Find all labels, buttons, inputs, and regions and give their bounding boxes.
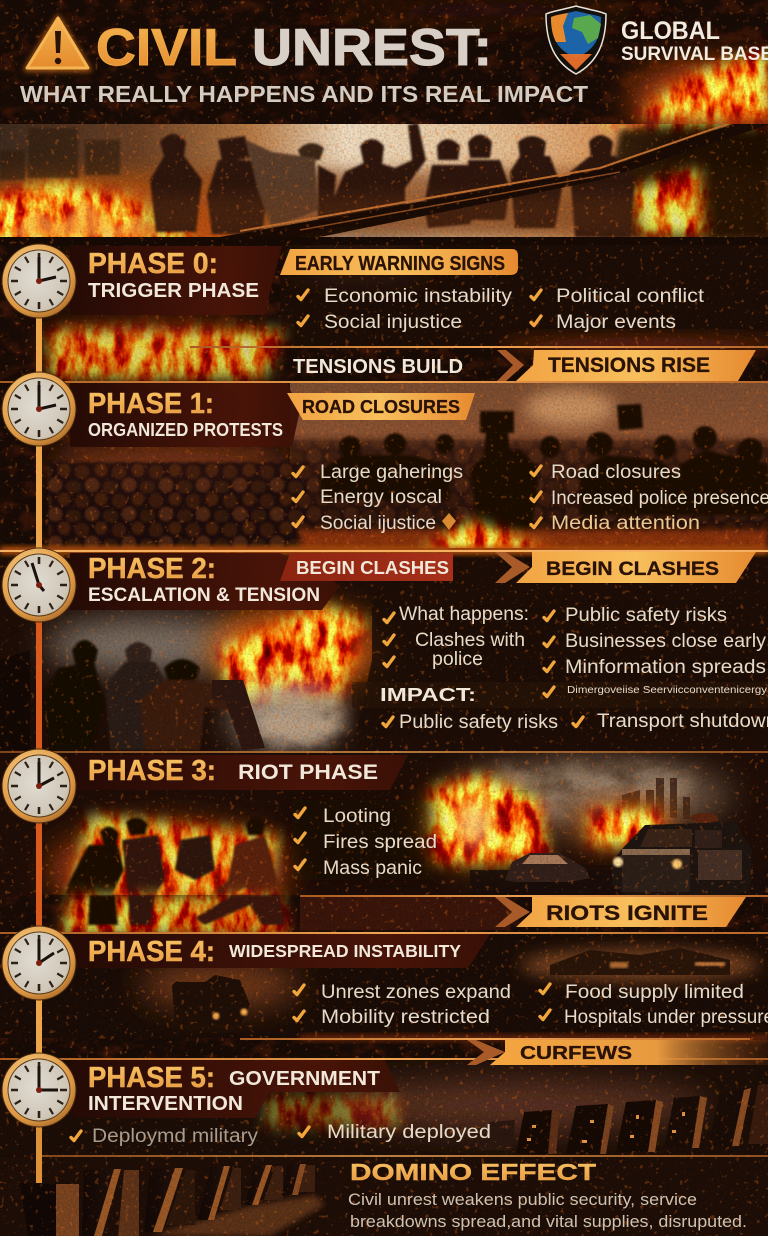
header flames background bbox=[310, 0, 768, 138]
domino heading: DOMINO EFFECT bbox=[350, 1159, 596, 1185]
phase 2 subtitle: ESCALATION & TENSION bbox=[88, 584, 320, 606]
checklist phase 0: Economic instability bbox=[324, 286, 513, 307]
checklist phase 3: Mass panic bbox=[323, 858, 422, 879]
phase 1 banner bbox=[70, 383, 300, 447]
brand name: GLOBAL bbox=[621, 17, 720, 45]
checklist phase 1: Energy ıoscal bbox=[320, 487, 442, 508]
domino description bbox=[348, 1190, 747, 1231]
phase 5 subtitle: INTERVENTION bbox=[88, 1093, 243, 1115]
checklist phase 2 bbox=[380, 604, 768, 733]
checklist phase 2: IMPACT: bbox=[380, 685, 476, 705]
arrow chevron bbox=[495, 897, 530, 927]
section divider lines bbox=[0, 346, 768, 1157]
riots ignite banner: RIOTS IGNITE bbox=[546, 902, 708, 925]
phase 0 scene bbox=[0, 237, 768, 378]
checklist phase 1: Media attention bbox=[551, 513, 700, 534]
phase 4 heading: PHASE 4: bbox=[88, 936, 215, 968]
phase 1 heading: PHASE 1: bbox=[88, 388, 214, 420]
checklist phase 1: Large gaherings bbox=[320, 462, 463, 483]
domino description: Civil unrest weakens public security, service bbox=[348, 1190, 697, 1209]
phase 5 scene: falling dominoes bbox=[0, 1060, 768, 1155]
checklist phase 2: Clashes with bbox=[415, 630, 525, 651]
phase 2 banner bbox=[70, 553, 340, 610]
checklist phase 3 bbox=[295, 806, 437, 879]
title block bbox=[20, 16, 589, 107]
curfews banner: CURFEWS bbox=[520, 1043, 632, 1063]
arrow chevron bbox=[497, 350, 524, 381]
hero image: riot police line bbox=[0, 124, 768, 237]
transition: tensions build to tensions rise bbox=[293, 350, 756, 381]
soldiers silhouettes bbox=[150, 123, 635, 237]
riots band scene bbox=[60, 895, 510, 935]
timeline vertical bar bbox=[36, 316, 42, 1183]
phase 3 scene: riot bbox=[0, 753, 768, 895]
icon: small diamond mark bbox=[442, 513, 456, 530]
checklist phase 5: Deploymd military bbox=[92, 1126, 259, 1147]
phase 0 subtitle: TRIGGER PHASE bbox=[88, 279, 259, 302]
phase 3 banner bbox=[70, 755, 408, 790]
domino effect section background bbox=[0, 1157, 768, 1236]
panel: domino effect bbox=[348, 1159, 747, 1231]
skyline bbox=[500, 778, 690, 819]
begin clashes gold banner bbox=[516, 552, 756, 583]
checklist phase 2: Dimergoveiise Seerviicconventenicergy bbox=[567, 685, 767, 696]
checklist phase 1 bbox=[293, 462, 768, 534]
phase 1 subtitle: ORGANIZED PROTESTS bbox=[88, 419, 283, 440]
phase 4 subtitle: WIDESPREAD INSTABILITY bbox=[229, 941, 461, 961]
clock icon phase 2 bbox=[2, 548, 76, 622]
begin clashes red tag bbox=[280, 553, 453, 581]
panel: phase 1 bbox=[2, 372, 768, 534]
curfews banner bbox=[490, 1040, 768, 1065]
checklist phase 2: Businesses close early bbox=[565, 631, 767, 652]
subtitle: WHAT REALLY HAPPENS AND ITS REAL IMPACT bbox=[20, 81, 589, 107]
tensions rise banner bbox=[516, 350, 756, 381]
checklist phase 0: Social injustice bbox=[324, 312, 462, 333]
phase 3 heading: PHASE 3: bbox=[88, 755, 216, 787]
riots ignite banner bbox=[516, 897, 746, 927]
phase 0 banner bbox=[70, 246, 282, 315]
tensions rise banner: TENSIONS RISE bbox=[548, 354, 710, 377]
checklist phase 1: Increased police presence bbox=[551, 488, 768, 509]
vehicles bbox=[470, 870, 510, 887]
domino description: breakdowns spread,and vital supplies, disruputed. bbox=[350, 1212, 747, 1231]
checklist phase 2: Public safety risks bbox=[399, 712, 558, 733]
checklist phase 3: Looting bbox=[323, 806, 391, 827]
checklist phase 0: Political conflict bbox=[556, 286, 705, 307]
panel: phase 0 bbox=[2, 244, 705, 333]
phase 4 scene: widespread instability bbox=[0, 934, 768, 1041]
icon: warning triangle bbox=[25, 16, 90, 70]
checklist phase 0: Major events bbox=[556, 312, 676, 333]
checklist phase 3: Fires spread bbox=[323, 832, 437, 853]
phase 5 banner bbox=[70, 1060, 400, 1118]
phase 2 scene: clashes with police bbox=[0, 552, 768, 751]
phase 0 heading: PHASE 0: bbox=[88, 248, 218, 280]
begin clashes gold banner: BEGIN CLASHES bbox=[546, 558, 719, 580]
checklist phase 4: Mobility restricted bbox=[321, 1007, 490, 1028]
phase 2 heading: PHASE 2: bbox=[88, 553, 216, 585]
clock icon phase 4 bbox=[2, 926, 76, 1000]
checklist phase 4 bbox=[294, 982, 768, 1028]
checklist phase 4: Unrest zones expand bbox=[321, 982, 511, 1003]
arrow chevron bbox=[495, 552, 530, 583]
checklist phase 5: Military deployed bbox=[327, 1122, 491, 1143]
phase 5 subtitle bbox=[88, 1068, 380, 1115]
checklist phase 4: Food supply limited bbox=[565, 982, 744, 1003]
phase 3 subtitle: RIOT PHASE bbox=[238, 761, 378, 784]
logo: Global Survival Base bbox=[546, 6, 768, 74]
phase 4 banner bbox=[70, 934, 490, 968]
road closures tag: ROAD CLOSURES bbox=[302, 397, 460, 417]
checklist phase 2: police bbox=[432, 649, 483, 670]
phase 1 scene: crowd bbox=[48, 383, 768, 553]
clock icon phase 5 bbox=[2, 1052, 76, 1128]
panel: phase 4 bbox=[2, 926, 768, 1065]
arrow chevron bbox=[467, 1040, 505, 1065]
checklist phase 2: Minformation spreads bbox=[565, 657, 766, 678]
checklist phase 2: Transport shutdown bbox=[597, 711, 768, 732]
road closures tag bbox=[287, 393, 475, 420]
clock icon phase 3 bbox=[2, 748, 76, 824]
phase 5 heading: PHASE 5: bbox=[88, 1062, 215, 1094]
title: Civil: CIVIL bbox=[96, 19, 237, 77]
early warning signs tag: EARLY WARNING SIGNS bbox=[295, 253, 505, 275]
dominoes: lower left bbox=[20, 1164, 315, 1236]
clock icon phase 0 bbox=[2, 244, 76, 318]
title: Unrest: UNREST: bbox=[252, 19, 492, 77]
panel: phase 3 bbox=[2, 748, 746, 927]
tensions build label: TENSIONS BUILD bbox=[293, 356, 463, 378]
begin clashes red tag: BEGIN CLASHES bbox=[296, 558, 449, 578]
checklist phase 1: Road closures bbox=[551, 462, 681, 483]
checklist phase 0 bbox=[298, 286, 705, 333]
checklist phase 1: Social ijustice bbox=[320, 513, 436, 534]
checklist phase 2: What happens: bbox=[399, 604, 529, 625]
clock icon phase 1 bbox=[2, 372, 76, 446]
icon: globe shield bbox=[546, 6, 606, 74]
checklist phase 5 bbox=[71, 1122, 491, 1147]
panel: phase 5 bbox=[2, 1052, 491, 1147]
checklist phase 2: Public safety risks bbox=[565, 605, 727, 626]
phase 5 subtitle: GOVERNMENT bbox=[229, 1068, 380, 1090]
panel: phase 2 bbox=[2, 548, 768, 733]
